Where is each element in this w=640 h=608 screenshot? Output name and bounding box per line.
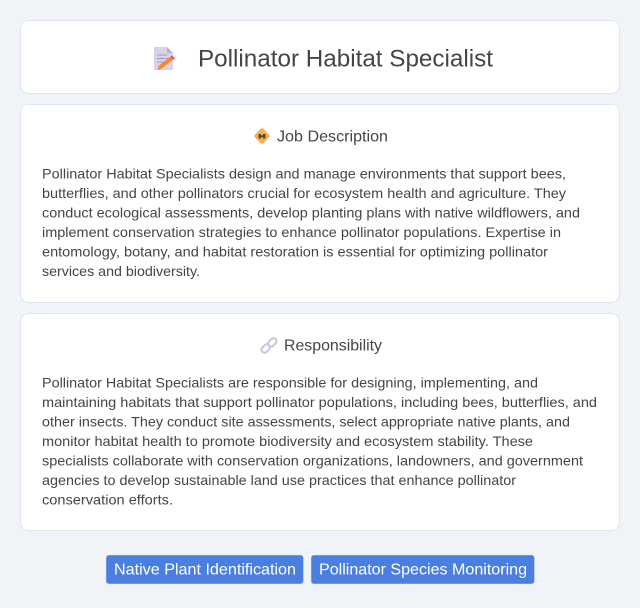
text block: job description: Pollinator Habitat Specialists design and manage environments that support bees,	[42, 166, 566, 182]
text block: job description: butterflies, and other pollinators crucial for ecosystem health and agriculture. They	[42, 185, 566, 201]
heading: job description: Job Description	[277, 128, 388, 146]
text block: responsibility: agencies to develop sustainable land use practices that enhance pollinator	[42, 472, 516, 488]
tag: native plant identification: Native Plant Identification	[114, 562, 296, 578]
text block: job description	[42, 166, 580, 279]
text block: responsibility: other insects. They conduct site assessments, select appropriate native plants, and	[42, 414, 570, 430]
tag: native plant identification	[106, 555, 304, 584]
text block: responsibility: monitor habitat health to promote biodiversity and ecosystem stability. These	[42, 433, 533, 449]
text block: responsibility: specialists collaborate with conservation organizations, landowners, and government	[42, 452, 583, 468]
panel: job description	[20, 104, 620, 302]
text block: job description: entomology, botany, and habitat restoration is essential for optimizing pollinator	[42, 244, 548, 260]
icon: chain link	[260, 337, 278, 354]
icon: document with pencil	[154, 47, 175, 70]
text block: responsibility: Pollinator Habitat Specialists are responsible for designing, implementing, and	[42, 374, 538, 390]
text block: job description: conduct ecological assessments, develop planting plans with native wildflowers, and	[42, 204, 580, 220]
icon: orange diamond	[254, 128, 270, 144]
text block: job description: services and biodiversity.	[42, 263, 200, 279]
text block: job description: implement conservation strategies to enhance pollinator populations. Expertise in	[42, 224, 561, 240]
panel: responsibility	[20, 314, 620, 530]
tag: pollinator species monitoring: Pollinator Species Monitoring	[319, 562, 527, 578]
heading: responsibility: Responsibility	[284, 338, 382, 354]
tag: pollinator species monitoring	[311, 555, 534, 584]
text block: responsibility: maintaining habitats that support pollinator populations, including bees, butterflies, and	[42, 394, 597, 410]
text block: responsibility	[42, 374, 597, 508]
title: Pollinator Habitat Specialist	[198, 46, 493, 72]
text block: responsibility: conservation efforts.	[42, 492, 173, 508]
panel: title card	[20, 20, 620, 94]
